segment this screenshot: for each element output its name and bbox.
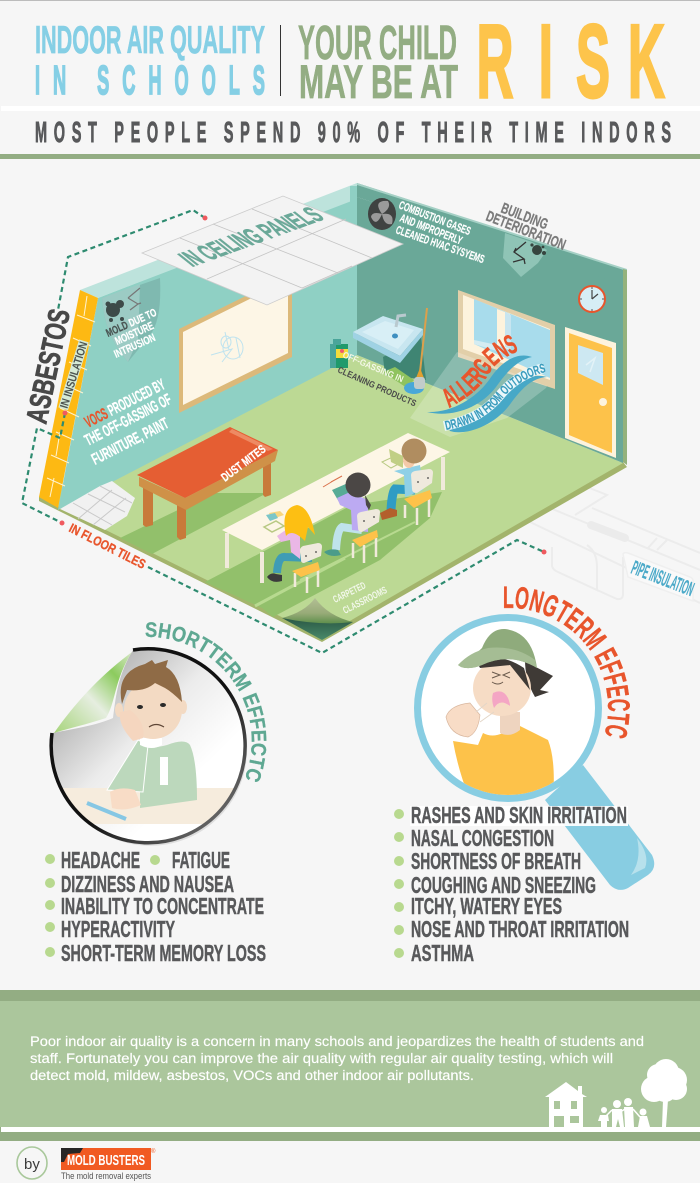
title: indoor air quality in schools: IN SCHOOLS bbox=[35, 58, 265, 103]
subtitle: MOST PEOPLE SPEND 90% OF THEIR TIME INDORS bbox=[35, 115, 671, 148]
callout dots bbox=[60, 216, 546, 554]
combustion gases text: CLEANED HVAC SYSYEMS bbox=[394, 224, 486, 266]
combustion gases text bbox=[394, 200, 486, 266]
by badge: by bbox=[24, 1156, 40, 1173]
carpet label: CLASSROOMS bbox=[341, 585, 389, 617]
title: indoor air quality in schools bbox=[35, 19, 265, 103]
sticker rim bbox=[51, 649, 245, 843]
mold busters logo: ® bbox=[151, 1148, 156, 1155]
building deterioration label: BUILDING bbox=[499, 200, 550, 233]
insulation strip bbox=[39, 290, 98, 508]
student: girl with dark hair bbox=[324, 472, 380, 563]
window bbox=[458, 290, 555, 389]
handle bbox=[545, 765, 654, 890]
magnifying glass bbox=[418, 618, 654, 890]
mold text bbox=[104, 307, 159, 361]
short-term symptoms list: HEADACHE bbox=[61, 847, 140, 873]
building deterioration label bbox=[484, 200, 568, 254]
light beam bbox=[410, 352, 547, 437]
cleaning products text: OFF-GASSING IN bbox=[341, 350, 405, 384]
VOCs text: THE OFF-GASSING OF bbox=[82, 391, 175, 450]
student: girl with yellow hair bbox=[267, 505, 322, 593]
dotted callout lines bbox=[22, 210, 544, 653]
building deterioration label: DETERIORATION bbox=[484, 208, 568, 254]
short-term symptoms list: FATIGUE bbox=[172, 847, 230, 873]
long-term symptoms list: ASTHMA bbox=[411, 940, 474, 966]
long-term symptoms list: ITCHY, WATERY EYES bbox=[411, 893, 562, 919]
floor mat bbox=[383, 367, 414, 388]
floor bbox=[39, 355, 627, 642]
pipe insulation diagram bbox=[530, 487, 700, 603]
door bbox=[565, 327, 616, 458]
short-term symptoms list bbox=[45, 847, 266, 966]
drawn in from outdoors text: DRAWN IN FROM OUTDOORS bbox=[444, 364, 546, 430]
icon: house bbox=[545, 1082, 587, 1127]
cleaning products text: CLEANING PRODUCTS bbox=[336, 365, 418, 408]
short-term symptoms list: DIZZINESS AND NAUSEA bbox=[61, 871, 234, 897]
footer paragraph: Poor indoor air quality is a concern in many schools and jeopardizes the health of students and bbox=[30, 1034, 644, 1049]
title: your child may be at risk: RISK bbox=[477, 4, 665, 120]
mold text: INTRUSION bbox=[112, 332, 157, 361]
whiteboard bbox=[179, 273, 292, 413]
dust mites label: DUST MITES bbox=[218, 442, 268, 484]
short-term symptoms list: INABILITY TO CONCENTRATE bbox=[61, 893, 264, 919]
ceiling panels bbox=[142, 196, 403, 305]
VOCs text: FURNITURE, PAINT bbox=[89, 415, 172, 469]
icon: tree bbox=[641, 1059, 687, 1127]
footer paragraph bbox=[30, 1034, 644, 1083]
footer logo bbox=[17, 1147, 156, 1181]
in floor tiles label: IN FLOOR TILES bbox=[67, 520, 149, 572]
title: your child may be at risk: MAY BE AT bbox=[299, 56, 458, 109]
carpet label bbox=[331, 580, 389, 617]
short-term symptoms list: HYPERACTIVITY bbox=[61, 916, 175, 942]
short-term symptoms list: SHORT-TERM MEMORY LOSS bbox=[61, 940, 266, 966]
mold busters logo: The mold removal experts bbox=[61, 1171, 151, 1181]
title: your child may be at risk: YOUR CHILD bbox=[298, 16, 457, 70]
red table bbox=[137, 427, 278, 540]
lens bbox=[418, 618, 598, 798]
long-term symptoms list: NASAL CONGESTION bbox=[411, 825, 554, 851]
combustion gases text: AND IMPROPERLY bbox=[398, 213, 464, 248]
mold busters logo: MOLD BUSTERS bbox=[67, 1152, 145, 1169]
allergens heading: ALLERGENS bbox=[443, 335, 518, 408]
long student table bbox=[222, 433, 450, 583]
carpet label: CARPETED bbox=[331, 580, 368, 606]
carpeted classrooms bbox=[282, 580, 389, 640]
allergens ribbon bbox=[427, 335, 547, 432]
long-term symptoms list: SHORTNESS OF BREATH bbox=[411, 848, 581, 874]
VOCs text bbox=[82, 376, 175, 469]
mold text: MOLD DUE TO bbox=[104, 307, 159, 340]
cleaning products text bbox=[336, 350, 418, 408]
boy illustration bbox=[63, 660, 234, 824]
back wall bbox=[357, 197, 623, 463]
fan bbox=[368, 198, 396, 230]
whiteboard scribble bbox=[211, 332, 243, 362]
sticker curl bbox=[54, 652, 132, 733]
floor tiles bbox=[60, 481, 135, 530]
sink bbox=[353, 315, 426, 380]
combustion gases text: COMBUSTION GASES bbox=[397, 200, 472, 238]
classroom illustration bbox=[39, 183, 627, 642]
deterioration patch bbox=[503, 233, 547, 277]
mop bbox=[404, 308, 427, 394]
footer paragraph: detect mold, mildew, asbestos, VOCs and other indoor air pollutants. bbox=[30, 1068, 474, 1083]
student: boy with brown hair bbox=[380, 438, 433, 525]
mold busters logo bbox=[61, 1148, 156, 1181]
shortterm effect heading: SHORTTERM EFFECTC bbox=[145, 622, 266, 782]
footer paragraph: staff. Fortunately you can improve the air quality with regular air quality testing, which will bbox=[30, 1051, 613, 1066]
short-term sticker bbox=[50, 649, 250, 846]
title: indoor air quality in schools: INDOOR AIR QUALITY bbox=[35, 19, 265, 62]
cleaning bottle bbox=[330, 339, 348, 368]
header bbox=[0, 0, 700, 159]
clock bbox=[579, 286, 605, 312]
coughing boy bbox=[446, 629, 554, 800]
icon: family bbox=[598, 1098, 650, 1127]
long-term symptoms list bbox=[394, 802, 629, 966]
white label behind first list item bbox=[410, 806, 628, 826]
mold text: MOISTURE bbox=[113, 320, 156, 348]
longterm effect heading: LONGTERM EFFECTC bbox=[504, 586, 630, 738]
left wall bbox=[58, 197, 357, 510]
in insulation label: IN INSULATION bbox=[59, 340, 90, 410]
title: your child may be at risk bbox=[298, 4, 665, 120]
ceiling panels label: IN CEILING PANELS bbox=[172, 203, 331, 271]
asbestos label: ASBESTOS bbox=[21, 306, 77, 426]
footer panel bbox=[0, 990, 700, 1141]
mold patch on left wall bbox=[102, 278, 160, 362]
VOCs text: VOCS PRODUCED BY bbox=[82, 376, 168, 432]
